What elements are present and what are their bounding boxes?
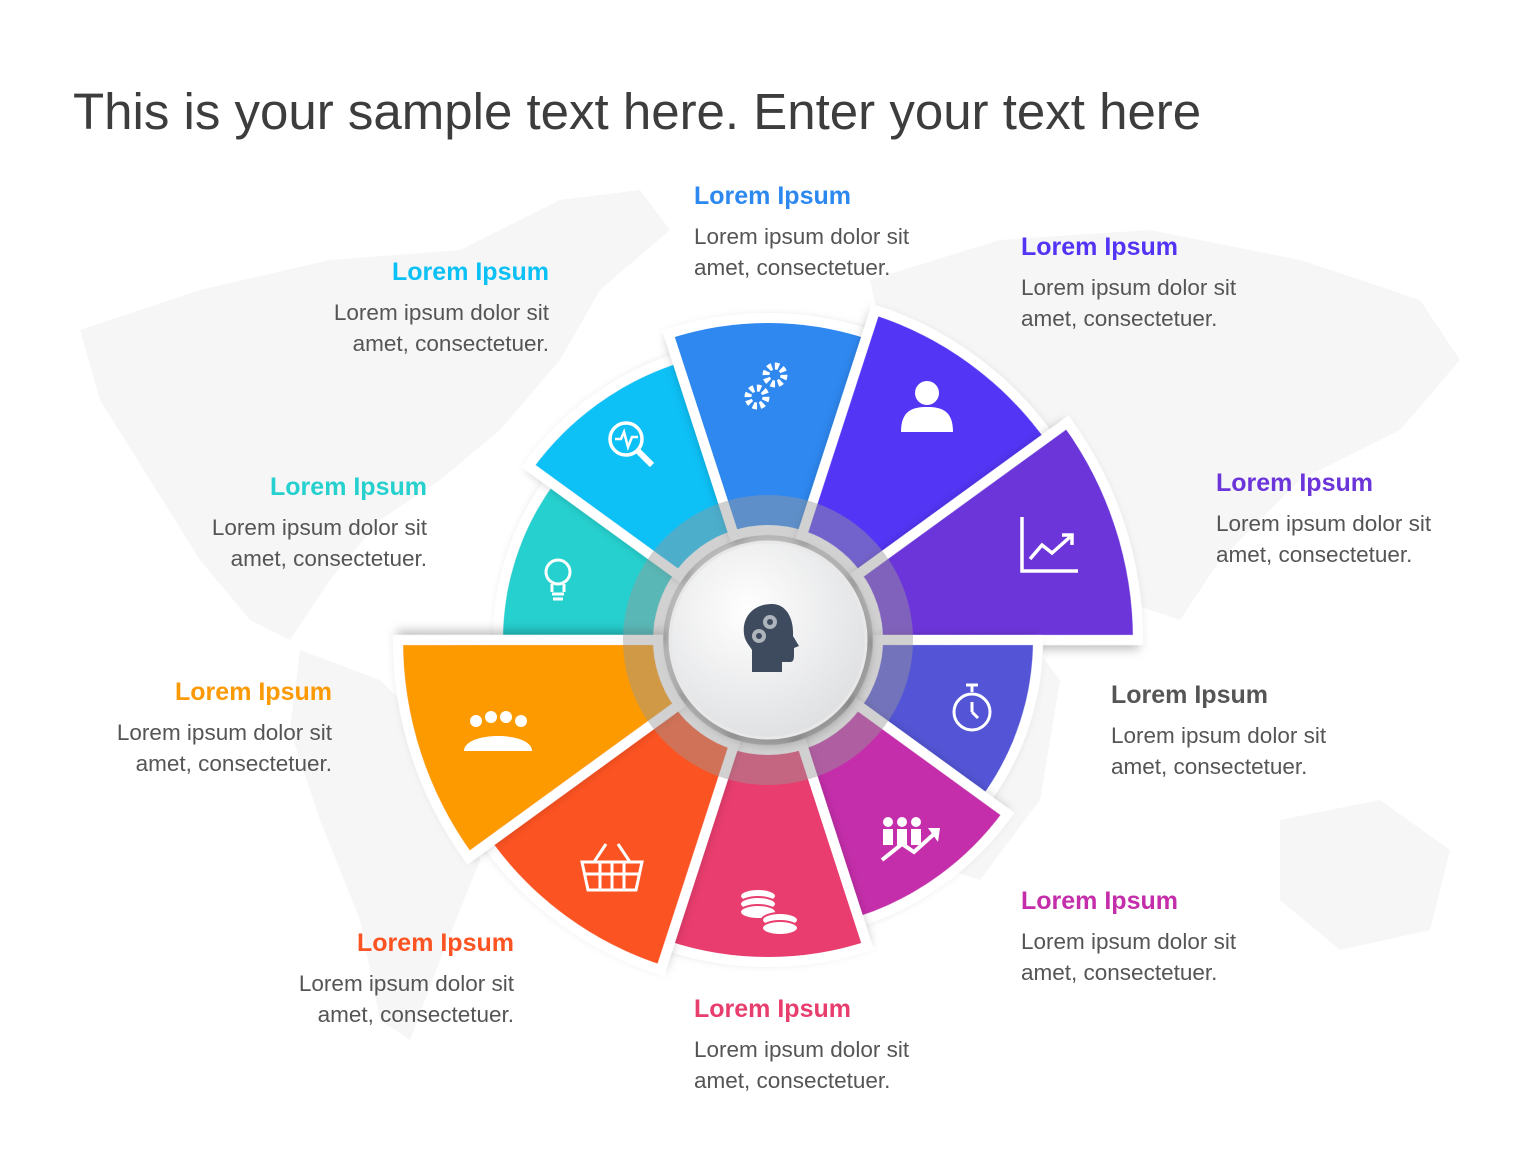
icon: basket	[582, 844, 642, 890]
title: This is your sample text here. Enter your text here	[73, 83, 1201, 140]
label: teal: Lorem ipsum dolor sit	[212, 515, 427, 540]
label: blue: Lorem Ipsum	[694, 182, 851, 210]
label: blue: Lorem ipsum dolor sit	[694, 224, 909, 249]
label: blue: amet, consectetuer.	[694, 255, 890, 280]
label: purple: Lorem Ipsum	[1216, 469, 1373, 497]
label: teal: amet, consectetuer.	[231, 546, 427, 571]
label: indigo: Lorem ipsum dolor sit	[1111, 723, 1326, 748]
icon: lightbulb	[546, 560, 570, 599]
segment: magenta	[755, 671, 1016, 933]
label: orange: Lorem Ipsum	[175, 678, 332, 706]
label: violet: Lorem Ipsum	[1021, 233, 1178, 261]
label: red orange: Lorem Ipsum	[357, 929, 514, 957]
label: light blue: amet, consectetuer.	[353, 331, 549, 356]
segment: indigo	[842, 593, 1051, 803]
label: violet: Lorem ipsum dolor sit	[1021, 275, 1236, 300]
label: red orange: amet, consectetuer.	[318, 1002, 514, 1027]
segment: teal	[485, 477, 694, 687]
icon: head with gears	[744, 604, 799, 672]
label: red orange: Lorem ipsum dolor sit	[299, 971, 514, 996]
center disc	[670, 542, 866, 738]
label: indigo: Lorem Ipsum	[1111, 681, 1268, 709]
segment: purple	[832, 417, 1155, 716]
label: pink: Lorem Ipsum	[694, 995, 851, 1023]
icon: team growth	[882, 817, 940, 860]
label: pink: Lorem ipsum dolor sit	[694, 1037, 909, 1062]
segment: orange	[381, 564, 704, 863]
label: purple: Lorem ipsum dolor sit	[1216, 511, 1431, 536]
label: magenta: Lorem ipsum dolor sit	[1021, 929, 1236, 954]
icon: chart	[1022, 517, 1078, 571]
label: orange	[117, 678, 332, 776]
label: teal: Lorem Ipsum	[270, 473, 427, 501]
label: orange: Lorem ipsum dolor sit	[117, 720, 332, 745]
icon: person	[901, 381, 953, 432]
segment: red orange	[477, 662, 793, 984]
segment: light blue	[520, 347, 781, 609]
label: pink	[694, 995, 909, 1093]
label: orange: amet, consectetuer.	[136, 751, 332, 776]
label: indigo: amet, consectetuer.	[1111, 754, 1307, 779]
icon: gears	[748, 366, 784, 406]
label: purple	[1216, 469, 1431, 567]
label: violet: amet, consectetuer.	[1021, 306, 1217, 331]
icon: stopwatch	[954, 685, 990, 730]
label: magenta	[1021, 887, 1236, 985]
label: pink: amet, consectetuer.	[694, 1068, 890, 1093]
label: purple: amet, consectetuer.	[1216, 542, 1412, 567]
center ring	[623, 495, 913, 785]
label: light blue	[334, 258, 549, 356]
icon: meeting group	[464, 711, 532, 751]
label: teal	[212, 473, 427, 571]
label: magenta: amet, consectetuer.	[1021, 960, 1217, 985]
icon: magnifier	[610, 423, 652, 465]
icon: coins	[740, 889, 798, 935]
segment: blue	[668, 318, 868, 535]
label: magenta: Lorem Ipsum	[1021, 887, 1178, 915]
label: violet	[1021, 233, 1236, 331]
label: indigo	[1111, 681, 1326, 779]
label: red orange	[299, 929, 514, 1027]
label: light blue: Lorem ipsum dolor sit	[334, 300, 549, 325]
label: blue	[694, 182, 909, 280]
label: light blue: Lorem Ipsum	[392, 258, 549, 286]
segment: pink	[668, 745, 868, 962]
segment: violet	[743, 296, 1059, 618]
